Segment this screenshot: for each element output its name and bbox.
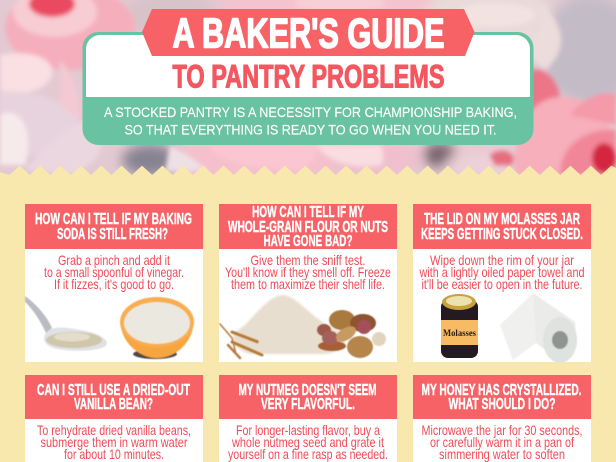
title card: [82, 9, 534, 145]
icon: wheat: [220, 324, 262, 358]
answer: simmering water to soften: [439, 446, 565, 462]
question: [422, 382, 582, 413]
question: [228, 204, 388, 250]
answer: [44, 252, 184, 292]
subtitle: to pantry problems: TO PANTRY PROBLEMS: [172, 58, 444, 94]
icon: spoon of vinegar: [25, 296, 107, 351]
answer: If it fizzes, it's good to go.: [54, 276, 174, 292]
question: HOW CAN I TELL IF MY BAKING: [35, 211, 192, 228]
intro text: A STOCKED PANTRY IS A NECESSITY FOR CHAMPIONSHIP BAKING,: [104, 104, 517, 120]
icon: molasses jar: [441, 294, 478, 358]
cream background with zigzag edge: [0, 166, 616, 462]
answer: For longer-lasting flavor, buy a: [236, 422, 380, 438]
answer: [422, 422, 582, 462]
answer: yourself on a fine rasp as needed.: [228, 446, 388, 462]
answer: To rehydrate dried vanilla beans,: [37, 422, 191, 438]
panel: nutmeg: [219, 375, 397, 462]
panel: vanilla bean: [25, 375, 203, 462]
icon: bowl of baking soda: [120, 297, 194, 359]
question: HOW CAN I TELL IF MY: [252, 204, 364, 221]
panel: molasses jar: [413, 204, 591, 363]
question: [37, 382, 190, 413]
answer: to a small spoonful of vinegar.: [44, 264, 184, 280]
answer: [37, 422, 191, 462]
question: WHOLE-GRAIN FLOUR OR NUTS: [228, 219, 388, 236]
answer: [225, 252, 391, 292]
answer: Grab a pinch and add it: [58, 252, 170, 268]
answer: whole nutmeg seed and grate it: [231, 434, 384, 450]
intro text: SO THAT EVERYTHING IS READY TO GO WHEN YOU NEED IT.: [124, 122, 496, 138]
intro text: [104, 104, 517, 138]
icon: flour pile: [233, 295, 345, 354]
icon: molasses jar: Molasses: [443, 328, 476, 338]
question: VANILLA BEAN?: [74, 396, 153, 413]
question: WHAT SHOULD I DO?: [448, 396, 556, 413]
answer: for about 10 minutes.: [64, 446, 164, 462]
header photo: sugar roses: [0, 0, 616, 180]
answer: You'll know if they smell off. Freeze: [225, 264, 391, 280]
answer: [228, 422, 388, 462]
question: MY NUTMEG DOESN'T SEEM: [238, 382, 376, 399]
panel: whole-grain flour: [219, 204, 397, 362]
question: [35, 211, 192, 243]
question: HAVE GONE BAD?: [264, 233, 352, 250]
answer: Give them the sniff test.: [250, 252, 366, 268]
icon: paper towel roll: [500, 293, 577, 363]
answer: [419, 252, 584, 292]
question: [421, 211, 583, 243]
panel: honey: [413, 375, 591, 462]
answer: Wipe down the rim of your jar: [430, 252, 574, 268]
question: [238, 382, 376, 413]
title ribbon: A BAKER'S GUIDE: [172, 10, 444, 56]
answer: or carefully warm it in a pan of: [430, 434, 574, 450]
question: VERY FLAVORFUL.: [261, 396, 355, 413]
icon: nuts: [317, 310, 386, 358]
question: CAN I STILL USE A DRIED-OUT: [37, 382, 190, 399]
answer: submerge them in warm water: [40, 434, 188, 450]
question: SODA IS STILL FRESH?: [57, 226, 168, 243]
answer: them to maximize their shelf life.: [231, 276, 385, 292]
panel: baking soda: [25, 204, 203, 362]
